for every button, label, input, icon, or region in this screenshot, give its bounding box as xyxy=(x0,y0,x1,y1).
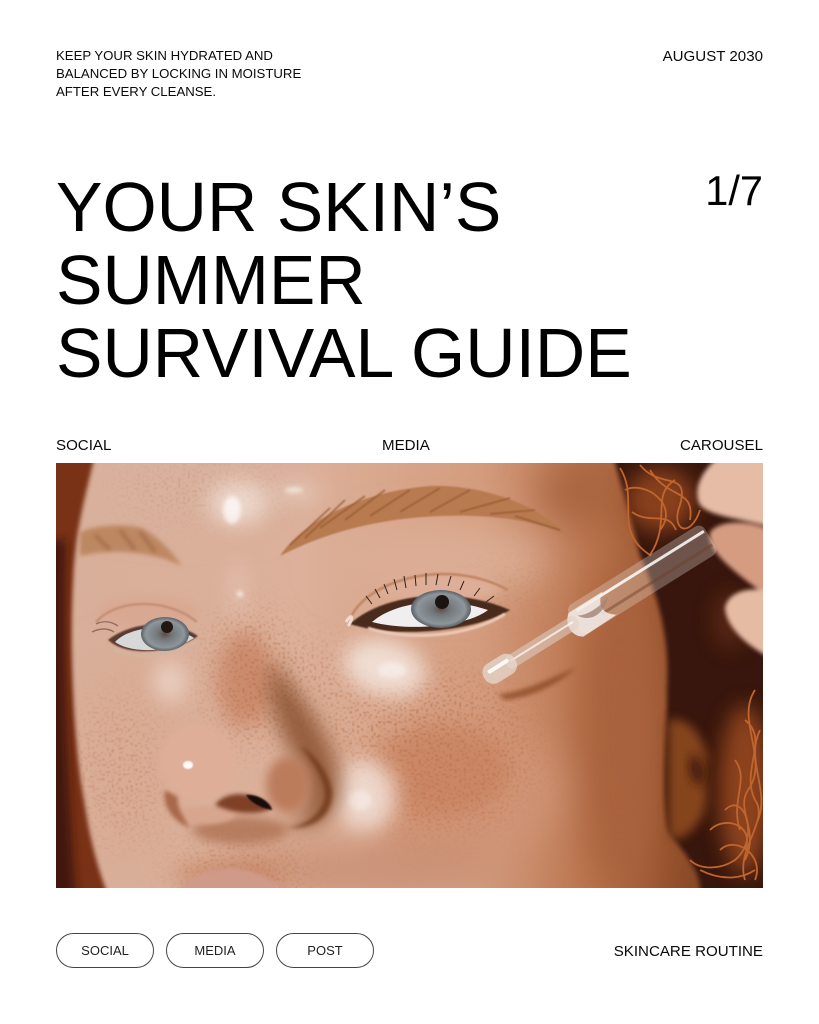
freckled areas xyxy=(170,632,510,887)
label: carousel: CAROUSEL xyxy=(680,437,763,454)
label: social: SOCIAL xyxy=(56,437,111,454)
pill: social: SOCIAL xyxy=(81,943,129,958)
serum dropper xyxy=(475,523,719,700)
right eyebrow xyxy=(280,486,572,556)
intro text: KEEP YOUR SKIN HYDRATED AND xyxy=(56,48,273,63)
photo: close-up of face with serum dropper xyxy=(56,463,763,888)
skin base xyxy=(69,463,704,888)
intro text: BALANCED BY LOCKING IN MOISTURE xyxy=(56,66,301,81)
right hair xyxy=(612,463,763,888)
label: media: MEDIA xyxy=(382,437,430,454)
lips xyxy=(181,866,280,888)
left eye xyxy=(92,596,198,655)
fingers xyxy=(694,463,763,658)
right eye xyxy=(346,573,510,636)
skincare routine label: SKINCARE ROUTINE xyxy=(614,943,763,960)
pill: media: MEDIA xyxy=(194,943,236,958)
title: YOUR SKIN’S xyxy=(56,168,501,246)
pill: social xyxy=(56,933,154,968)
pill: post: POST xyxy=(307,943,343,958)
intro text: AFTER EVERY CLEANSE. xyxy=(56,84,216,99)
pill: media xyxy=(166,933,264,968)
freckles xyxy=(78,464,536,888)
left hair xyxy=(56,463,109,888)
forehead and cheek tone xyxy=(218,463,660,888)
nose xyxy=(159,660,340,844)
page number: 1/7 xyxy=(705,167,763,214)
highlights on skin xyxy=(154,481,433,831)
title: SURVIVAL GUIDE xyxy=(56,314,632,392)
pill: post xyxy=(276,933,374,968)
intro text xyxy=(56,48,301,99)
title: SUMMER xyxy=(56,241,366,319)
date: AUGUST 2030 xyxy=(663,48,763,65)
title xyxy=(56,168,632,392)
left eyebrow xyxy=(80,525,182,566)
